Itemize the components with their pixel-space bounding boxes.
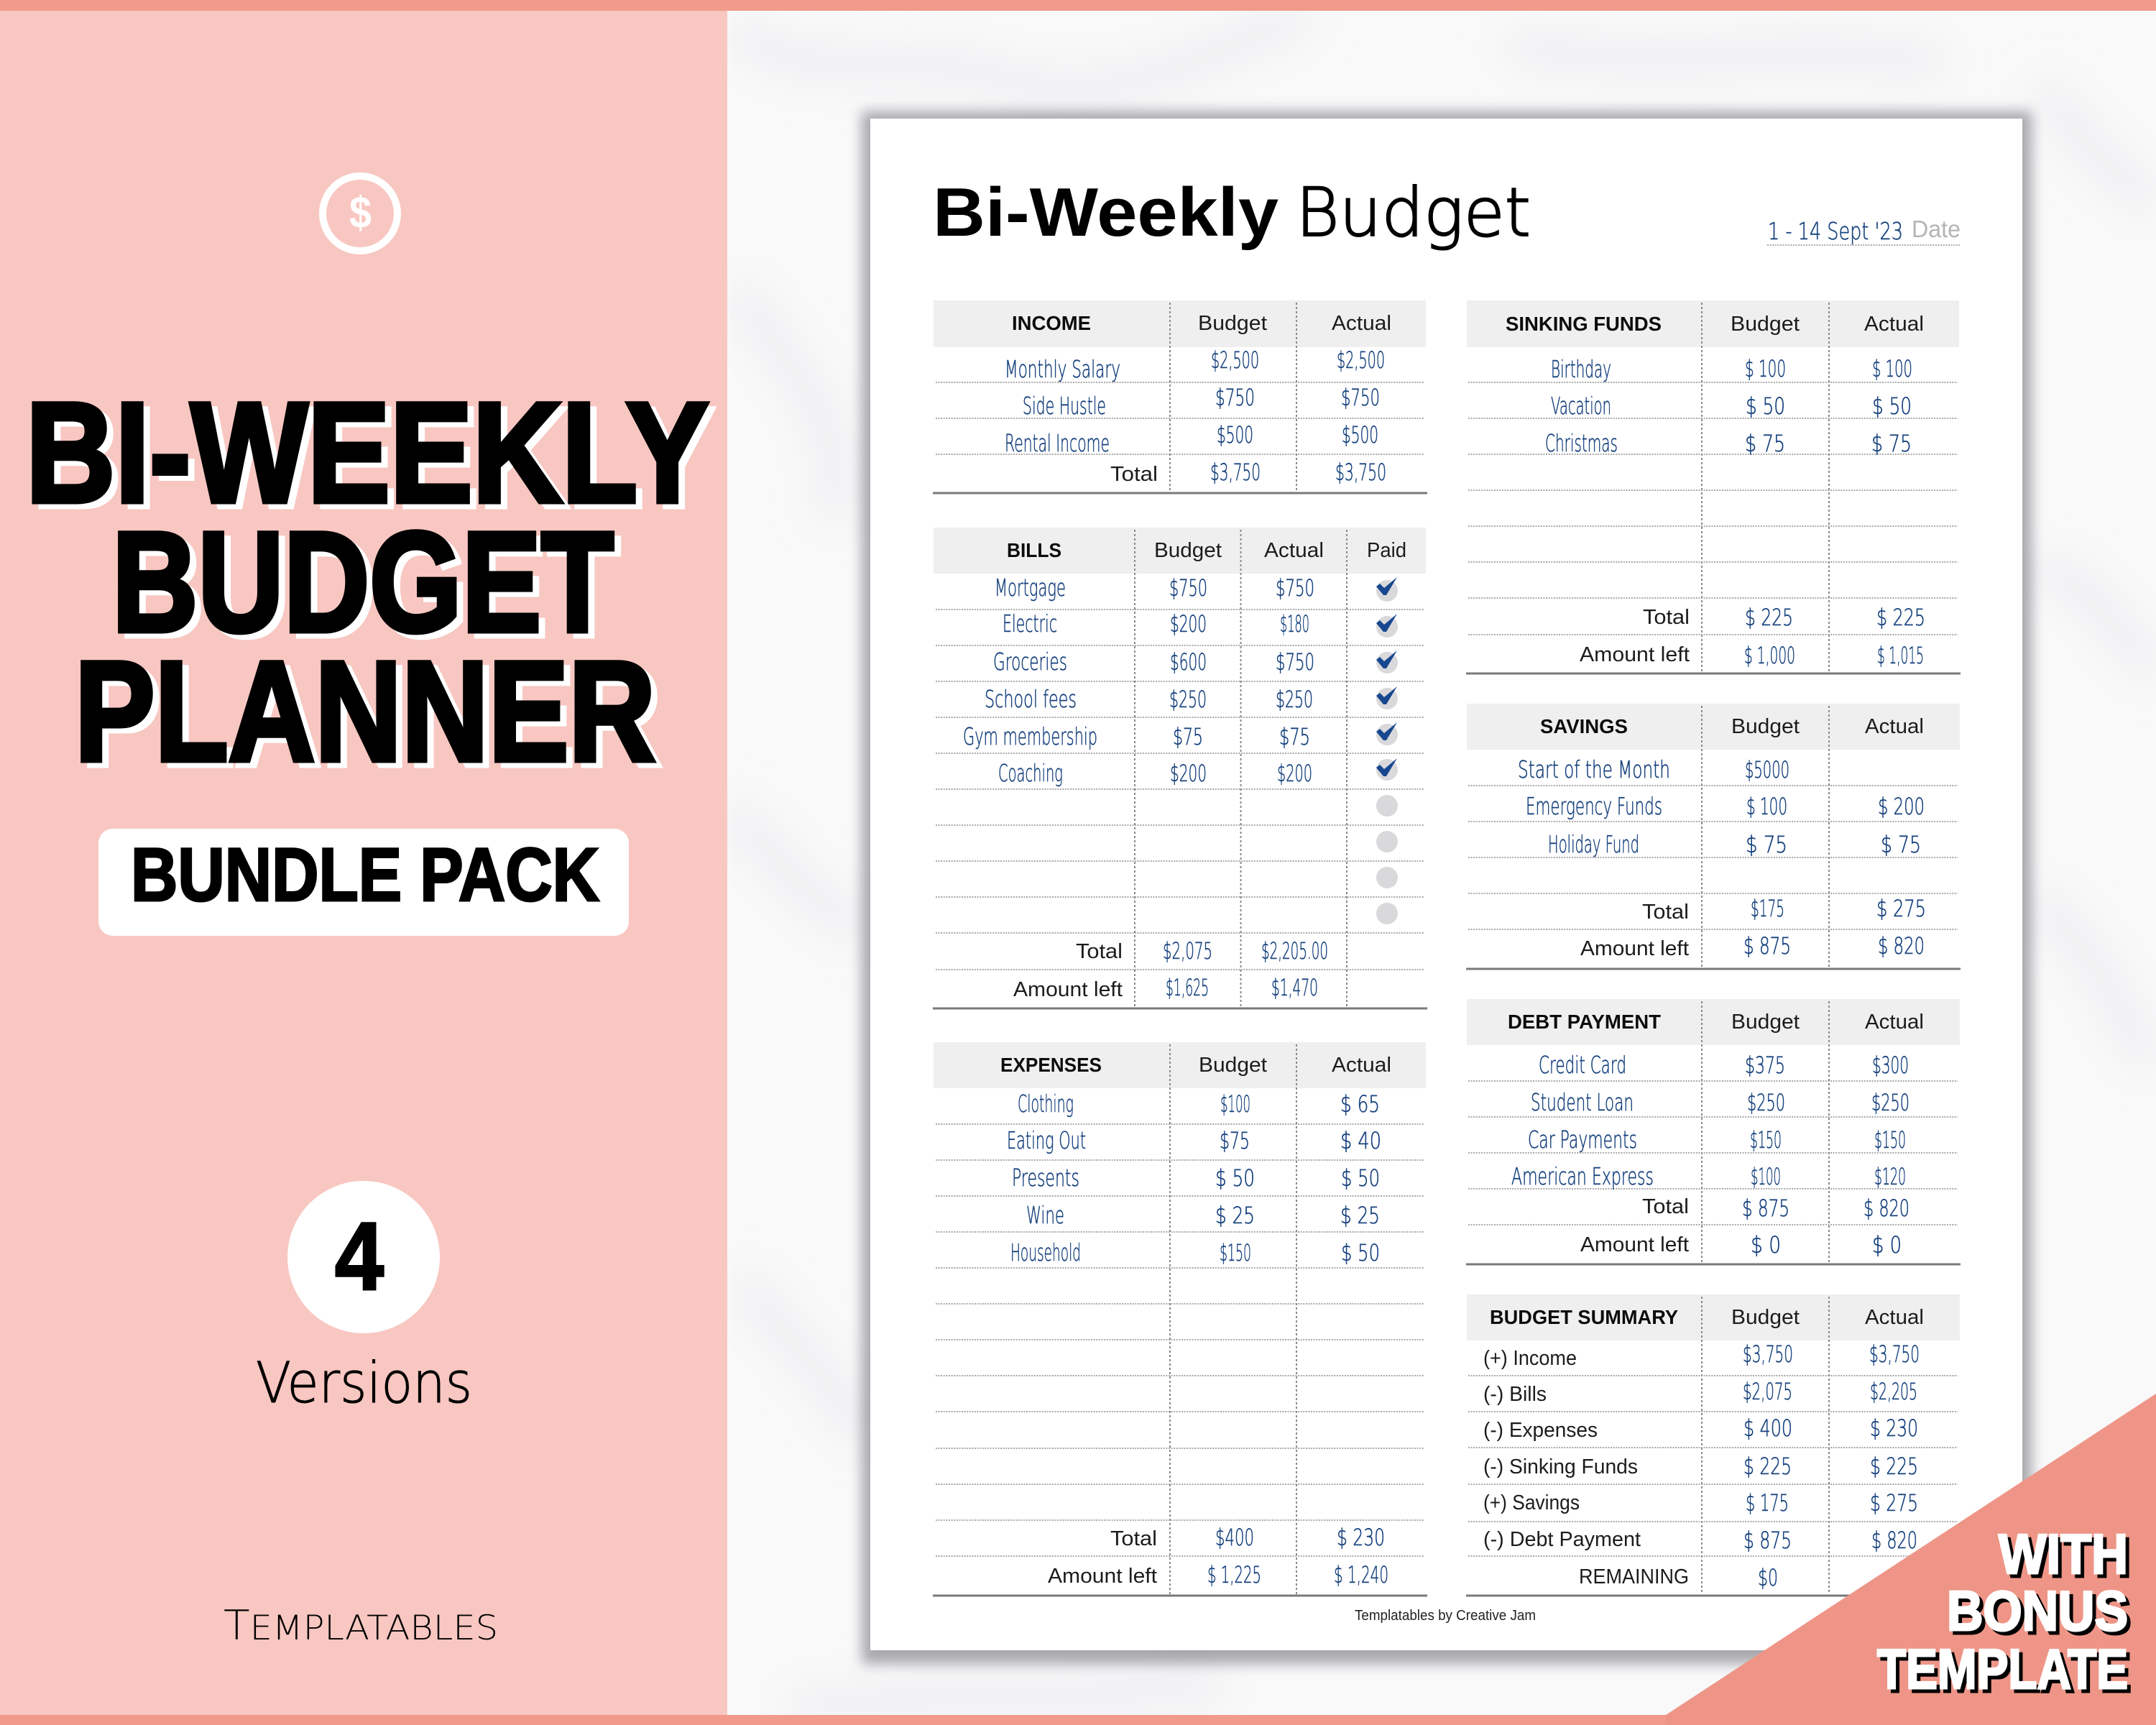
- bottom bar: [0, 1715, 2156, 1725]
- header row: Budget: [1731, 715, 1800, 738]
- title: Bi-Weekly Budget Planner: [26, 373, 715, 796]
- header row: Budget: [1731, 313, 1800, 336]
- icons: empty paid circles: [1376, 795, 1398, 924]
- row: American Express: $100: [1751, 1163, 1781, 1190]
- row: Total: $2,075: [1163, 937, 1212, 965]
- row: Savings: [1483, 1489, 1918, 1517]
- row: Total: $ 225: [1745, 604, 1793, 631]
- title: Bi-Weekly Budget Planner: PLANNER: [75, 632, 655, 791]
- row: Amount left: $ 0: [1872, 1231, 1902, 1259]
- row: Debt Payment: [1483, 1527, 1917, 1554]
- row: Household: [1010, 1238, 1380, 1266]
- row: Total: Total: [1076, 940, 1123, 963]
- header row: [1540, 715, 1924, 738]
- table: expenses: [933, 1042, 1427, 1596]
- row: Eating Out: [1007, 1126, 1381, 1154]
- row: Rental Income: Rental Income: [1005, 429, 1110, 457]
- row: Emergency Funds: $ 200: [1878, 793, 1925, 820]
- brand: Templatables: TEMPLATABLES: [224, 1602, 498, 1650]
- row: Side Hustle: $750: [1341, 384, 1380, 411]
- row: Eating Out: Eating Out: [1007, 1126, 1086, 1154]
- row: Birthday: $ 100: [1872, 355, 1912, 382]
- row: Presents: $ 50: [1341, 1164, 1380, 1192]
- row: Wine: [1026, 1201, 1380, 1229]
- row: Vacation: $ 50: [1746, 392, 1785, 420]
- row: Debt Payment: $ 820: [1871, 1527, 1917, 1554]
- header row: Paid: [1367, 539, 1406, 562]
- row: Car Payments: Car Payments: [1528, 1126, 1637, 1154]
- row: Amount left: [1580, 932, 1925, 960]
- row: Amount left: $ 820: [1878, 932, 1925, 960]
- row: Clothing: Clothing: [1018, 1090, 1074, 1118]
- row: Monthly Salary: $2,500: [1337, 346, 1385, 374]
- row: Amount left: [1580, 1231, 1902, 1259]
- row: Electric: Electric: [1003, 610, 1057, 638]
- row: Rental Income: [1005, 421, 1378, 457]
- row: Mortgage: Mortgage: [995, 574, 1066, 602]
- row: Debt Payment: (-) Debt Payment: [1483, 1528, 1641, 1551]
- row: Gym membership: Gym membership: [963, 722, 1097, 750]
- row: Amount left: $1,470: [1271, 974, 1318, 1001]
- row: Monthly Salary: $2,500: [1211, 346, 1259, 374]
- row: Amount left: $ 1,225: [1207, 1561, 1261, 1588]
- corner banner: with bonus template: WITH: [1999, 1522, 2128, 1586]
- row: Sinking Funds: $ 225: [1870, 1453, 1918, 1480]
- row: Total: $ 275: [1876, 895, 1926, 922]
- row: Total: Total: [1110, 1527, 1157, 1550]
- row: Total: [1110, 459, 1386, 486]
- row: Rental Income: $500: [1217, 421, 1253, 448]
- row: Sinking Funds: (-) Sinking Funds: [1483, 1455, 1638, 1478]
- row: Remaining: REMAINING: [1579, 1565, 1689, 1588]
- row: School fees: [985, 685, 1313, 713]
- row: Total: Total: [1642, 1195, 1689, 1218]
- row: Sinking Funds: [1483, 1453, 1918, 1480]
- header row: Actual: [1264, 539, 1324, 562]
- row: Wine: $ 25: [1215, 1202, 1255, 1229]
- row: Christmas: $ 75: [1871, 430, 1912, 457]
- row: Total: $ 225: [1876, 604, 1925, 631]
- row: Total: Total: [1643, 606, 1690, 629]
- row: Total: $400: [1215, 1524, 1254, 1551]
- row: Income: (+) Income: [1483, 1347, 1577, 1370]
- row: Emergency Funds: [1526, 792, 1925, 820]
- row: Bills: $2,205: [1870, 1378, 1917, 1405]
- row: Start of the Month: Start of the Month: [1518, 755, 1670, 783]
- header row: [1007, 539, 1406, 562]
- row: Savings: $ 175: [1746, 1489, 1789, 1517]
- row: Christmas: $ 75: [1745, 430, 1785, 457]
- table: sinking funds: [1466, 300, 1961, 673]
- row: American Express: [1511, 1162, 1906, 1190]
- row: Wine: $ 25: [1340, 1202, 1380, 1229]
- row: Total: [1643, 604, 1925, 631]
- row: Amount left: [1013, 974, 1318, 1001]
- row: Birthday: [1551, 355, 1912, 383]
- row: Student Loan: $250: [1871, 1089, 1909, 1116]
- row: Holiday Fund: [1548, 830, 1921, 858]
- row: Total: $ 875: [1742, 1195, 1789, 1222]
- top bar: [0, 0, 2156, 11]
- date field: 1 - 14 Sept '23: [1768, 217, 1903, 245]
- callout: 4 versions: [256, 1181, 472, 1416]
- row: Credit Card: $300: [1872, 1052, 1909, 1079]
- row: Income: $3,750: [1743, 1340, 1793, 1368]
- header row: Actual: [1865, 715, 1924, 738]
- table: income: [933, 300, 1427, 493]
- row: Rental Income: $500: [1342, 421, 1378, 448]
- row: Income: [1483, 1340, 1920, 1370]
- row: Groceries: [993, 648, 1314, 676]
- title: Bi-Weekly Budget Planner: BI-WEEKLY: [32, 378, 715, 537]
- corner banner: with bonus template: WITH: [2002, 1526, 2132, 1589]
- icon: dollar coin: [323, 176, 397, 251]
- row: Vacation: Vacation: [1551, 392, 1611, 420]
- row: Coaching: [998, 759, 1312, 787]
- row: Eating Out: $75: [1220, 1127, 1250, 1154]
- row: Emergency Funds: $ 100: [1746, 793, 1787, 820]
- panel: budget sheet: [870, 119, 2022, 1650]
- panel: left pink column: [0, 11, 727, 1715]
- row: Car Payments: $150: [1874, 1126, 1906, 1154]
- row: Expenses: (-) Expenses: [1483, 1419, 1598, 1442]
- row: Total: $175: [1751, 895, 1784, 922]
- row: Amount left: $ 1,000: [1744, 642, 1795, 669]
- row: Credit Card: [1539, 1051, 1909, 1079]
- header row: Budget: [1198, 312, 1267, 335]
- callout: 4 versions: Versions: [256, 1351, 472, 1416]
- row: Monthly Salary: [1005, 346, 1385, 383]
- table: debt payment: [1466, 999, 1961, 1264]
- row: Bills: $2,075: [1743, 1378, 1792, 1405]
- row: Coaching: $200: [1170, 760, 1207, 787]
- row: Side Hustle: $750: [1215, 384, 1255, 411]
- row: Amount left: [1580, 642, 1924, 669]
- row: Credit Card: Credit Card: [1539, 1051, 1626, 1079]
- row: Gym membership: [963, 722, 1310, 750]
- header row: Budget: [1731, 1011, 1800, 1034]
- row: Vacation: [1551, 392, 1912, 420]
- title: Bi-Weekly Budget Planner: PLANNER: [81, 637, 662, 796]
- heading: Bi-Weekly Budget: Bi-Weekly: [933, 174, 1279, 251]
- row: Bills: (-) Bills: [1483, 1383, 1547, 1406]
- row: Total: [1642, 1195, 1909, 1222]
- header row: Budget: [1199, 1054, 1267, 1077]
- header row: BUDGET SUMMARY: [1490, 1306, 1678, 1328]
- row: Total: $ 230: [1337, 1524, 1385, 1551]
- row: Clothing: $ 65: [1340, 1090, 1380, 1118]
- row: Monthly Salary: Monthly Salary: [1005, 355, 1120, 383]
- row: Total: $3,750: [1335, 459, 1386, 486]
- row: Total: $ 820: [1864, 1195, 1909, 1222]
- title: Bi-Weekly Budget Planner: BUDGET: [112, 502, 614, 661]
- date field: Date: [1912, 216, 1961, 242]
- icon: dollar coin: $: [349, 188, 372, 238]
- header row: BILLS: [1007, 539, 1061, 561]
- row: Household: $ 50: [1341, 1239, 1380, 1266]
- table: savings: [1466, 704, 1961, 969]
- header row: [1012, 312, 1391, 335]
- row: Birthday: $ 100: [1745, 355, 1786, 382]
- row: School fees: $250: [1276, 686, 1313, 713]
- header row: Actual: [1332, 1054, 1391, 1077]
- header row: SAVINGS: [1540, 715, 1628, 737]
- row: Total: Total: [1642, 901, 1689, 924]
- row: Remaining: [1579, 1564, 1778, 1591]
- row: Holiday Fund: Holiday Fund: [1548, 830, 1639, 858]
- row: Car Payments: $150: [1750, 1126, 1782, 1154]
- header row: EXPENSES: [1000, 1054, 1102, 1076]
- row: Holiday Fund: $ 75: [1746, 831, 1787, 858]
- row: Total: [1110, 1524, 1385, 1551]
- row: School fees: School fees: [985, 685, 1077, 713]
- header row: Actual: [1332, 312, 1391, 335]
- row: Mortgage: $750: [1169, 574, 1207, 602]
- row: Electric: $200: [1170, 610, 1207, 638]
- header row: [1490, 1306, 1924, 1329]
- row: Total: [1076, 937, 1328, 965]
- row: Total: $2,205.00: [1261, 937, 1328, 965]
- header row: Budget: [1731, 1306, 1800, 1329]
- table: bills: [933, 528, 1427, 1008]
- header row: Actual: [1865, 1011, 1924, 1034]
- table: budget summary: [1466, 1294, 1961, 1596]
- row: Amount left: Amount left: [1580, 937, 1689, 960]
- row: Amount left: $ 1,015: [1877, 642, 1924, 669]
- row: Side Hustle: Side Hustle: [1023, 392, 1106, 420]
- row: Expenses: $ 400: [1743, 1414, 1792, 1442]
- row: Car Payments: [1528, 1126, 1906, 1154]
- row: Emergency Funds: Emergency Funds: [1526, 792, 1662, 820]
- row: Amount left: Amount left: [1048, 1565, 1157, 1588]
- row: Remaining: $0: [1758, 1564, 1778, 1591]
- row: American Express: American Express: [1511, 1162, 1654, 1190]
- row: Income: $3,750: [1869, 1340, 1920, 1368]
- row: Savings: $ 275: [1870, 1489, 1918, 1517]
- title: Bi-Weekly Budget Planner: BI-WEEKLY: [26, 373, 709, 532]
- row: Household: $150: [1220, 1239, 1251, 1266]
- row: Presents: Presents: [1012, 1164, 1079, 1192]
- row: Debt Payment: $ 875: [1743, 1527, 1792, 1554]
- header row: DEBT PAYMENT: [1508, 1011, 1661, 1033]
- row: Expenses: $ 230: [1870, 1414, 1918, 1442]
- title: Bi-Weekly Budget Planner: BUDGET: [119, 507, 620, 666]
- footer credit: Templatables by Creative Jam: [1355, 1608, 1536, 1624]
- row: Holiday Fund: $ 75: [1881, 831, 1921, 858]
- heading: Bi-Weekly Budget: Budget: [1296, 174, 1531, 252]
- row: Christmas: Christmas: [1545, 429, 1618, 457]
- paper shadow: [862, 111, 2032, 1664]
- header row: [1000, 1054, 1391, 1077]
- row: Christmas: [1545, 429, 1912, 457]
- corner banner: with bonus template: [1666, 1394, 2156, 1725]
- row: Groceries: $600: [1170, 648, 1207, 676]
- row: Mortgage: $750: [1276, 574, 1314, 602]
- row: Electric: $180: [1280, 610, 1309, 638]
- row: Amount left: Amount left: [1013, 978, 1123, 1001]
- row: Amount left: [1048, 1561, 1388, 1588]
- row: Student Loan: $250: [1747, 1089, 1785, 1116]
- marble background: [727, 0, 2156, 1725]
- row: Student Loan: Student Loan: [1531, 1088, 1634, 1116]
- row: Start of the Month: $5000: [1745, 756, 1789, 783]
- header row: Actual: [1865, 1306, 1924, 1329]
- header row: SINKING FUNDS: [1506, 313, 1662, 335]
- row: Amount left: Amount left: [1580, 1233, 1689, 1256]
- row: Birthday: Birthday: [1551, 355, 1611, 383]
- row: Mortgage: [995, 574, 1314, 602]
- row: Total: $3,750: [1210, 459, 1261, 486]
- row: Coaching: Coaching: [998, 759, 1063, 787]
- row: Electric: [1003, 610, 1309, 638]
- row: Credit Card: $375: [1745, 1052, 1785, 1079]
- corner banner: with bonus template: BONUS: [1947, 1579, 2128, 1642]
- badge: bundle pack: BUNDLE PACK: [131, 833, 599, 917]
- header row: Actual: [1864, 313, 1924, 336]
- row: Student Loan: [1531, 1088, 1909, 1116]
- heading: Bi-Weekly Budget: [933, 174, 1531, 252]
- row: Vacation: $ 50: [1872, 392, 1912, 420]
- icons: paid checks: [1376, 577, 1398, 781]
- row: Savings: (+) Savings: [1483, 1491, 1580, 1514]
- row: Total: [1642, 895, 1926, 924]
- row: Amount left: $ 1,240: [1334, 1561, 1388, 1588]
- row: Wine: Wine: [1026, 1201, 1064, 1229]
- row: Presents: $ 50: [1215, 1164, 1255, 1192]
- row: Expenses: [1483, 1414, 1918, 1442]
- header row: INCOME: [1012, 312, 1091, 334]
- row: American Express: $120: [1874, 1163, 1906, 1190]
- row: Amount left: $1,625: [1166, 974, 1209, 1001]
- row: Gym membership: $75: [1173, 723, 1203, 750]
- row: School fees: $250: [1169, 686, 1207, 713]
- corner banner: with bonus template: BONUS: [1950, 1583, 2132, 1646]
- header row: [1506, 313, 1924, 336]
- row: Amount left: Amount left: [1580, 643, 1690, 666]
- row: Sinking Funds: $ 225: [1743, 1453, 1792, 1480]
- row: Amount left: $ 0: [1751, 1231, 1781, 1259]
- row: Eating Out: $ 40: [1340, 1127, 1381, 1154]
- row: Groceries: Groceries: [993, 648, 1067, 676]
- row: Groceries: $750: [1276, 648, 1314, 676]
- row: Amount left: $ 875: [1743, 932, 1791, 960]
- row: Bills: [1483, 1378, 1917, 1406]
- callout: 4 versions: 4: [335, 1203, 384, 1310]
- header row: [1508, 1011, 1924, 1034]
- header row: Budget: [1154, 539, 1222, 562]
- row: Household: Household: [1010, 1238, 1081, 1266]
- row: Side Hustle: [1023, 384, 1380, 420]
- row: Presents: [1012, 1164, 1380, 1192]
- row: Gym membership: $75: [1279, 723, 1310, 750]
- row: Clothing: [1018, 1090, 1380, 1118]
- row: Clothing: $100: [1220, 1090, 1250, 1118]
- row: Coaching: $200: [1277, 760, 1312, 787]
- badge: bundle pack: [98, 829, 629, 936]
- row: Total: Total: [1110, 463, 1158, 486]
